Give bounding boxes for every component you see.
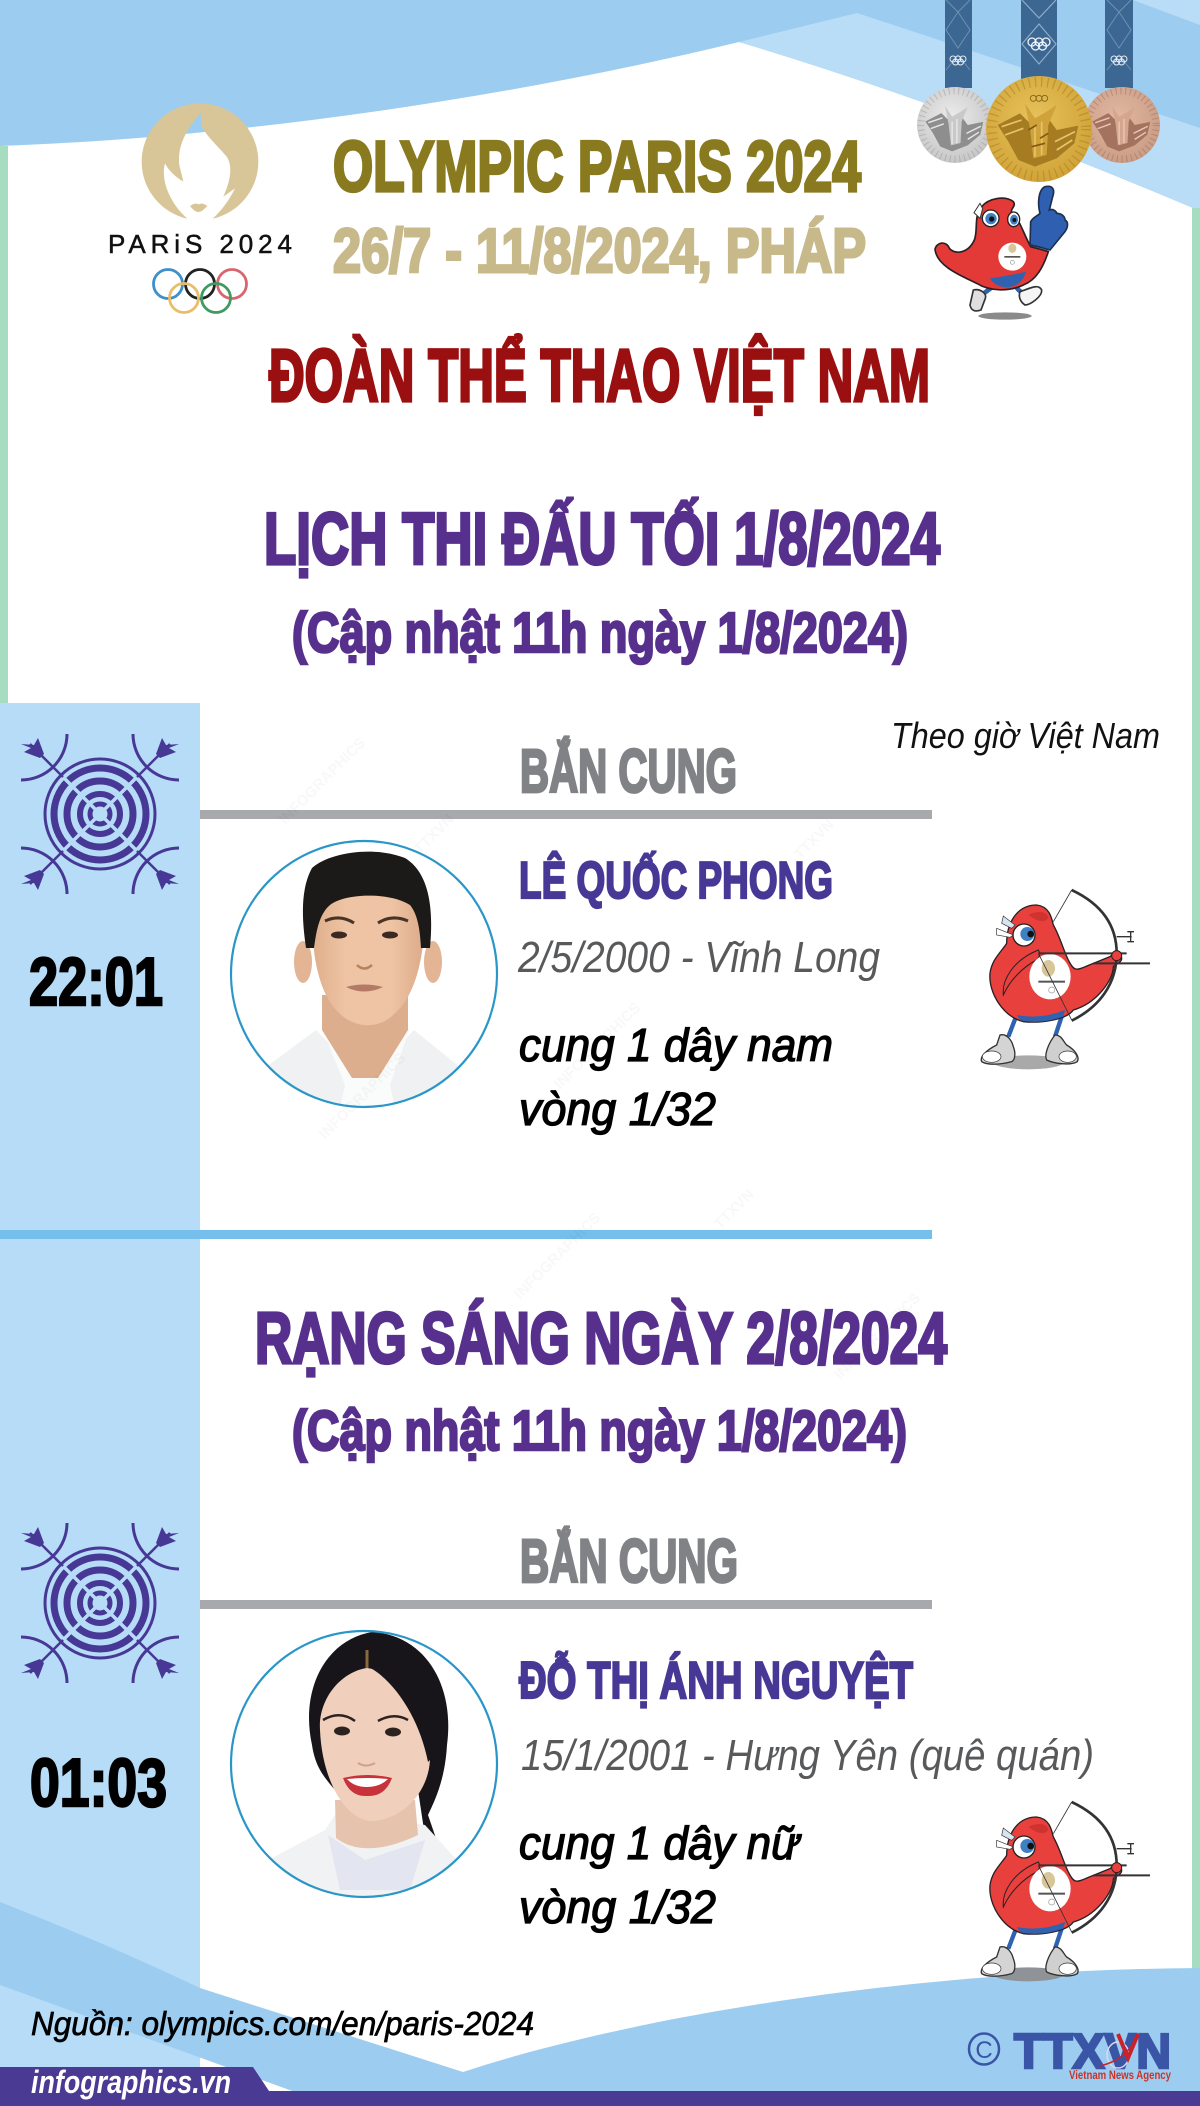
glove [1030, 186, 1067, 250]
footer site name: infographics.vn [31, 2064, 231, 2100]
ears [294, 941, 312, 983]
copyright mark: C [975, 2037, 993, 2064]
watermarks: TTXVN [711, 1186, 758, 1233]
collar [328, 1835, 425, 1890]
chest badge [998, 243, 1026, 271]
globe swoosh [1100, 2034, 1138, 2068]
round line 2: vòng 1/32 [519, 1881, 716, 1933]
neck [322, 995, 408, 1078]
shirt [269, 1030, 458, 1104]
legs [982, 278, 1024, 295]
time: 01:03: 01:03 [30, 1745, 167, 1821]
gold ribbon [1021, 0, 1057, 82]
flame emblem [142, 103, 258, 219]
heading: archery 2: BẮN CUNG [520, 1527, 738, 1595]
subheading: update time 2: (Cập nhật 11h ngày 1/8/2024) [292, 1399, 907, 1463]
wordmark: PARiS 2024 [108, 229, 292, 259]
fringe [372, 1668, 430, 1762]
heading: dates: 26/7 - 11/8/2024, PHÁP [333, 217, 866, 286]
heading: evening schedule: LỊCH THI ĐẤU TỐI 1/8/2024 [264, 498, 940, 580]
copyright mark [969, 2034, 999, 2064]
heading: early morning schedule: RẠNG SÁNG NGÀY 2/8/2024 [255, 1299, 947, 1379]
footer bar [0, 2067, 1200, 2106]
face [312, 892, 425, 1025]
bottom blue wave [0, 1902, 1200, 2092]
left green edge [0, 146, 8, 703]
shadow [978, 312, 1032, 320]
athlete portrait: Lê Quốc Phong [231, 841, 497, 1120]
mascot: archer 2 [981, 1802, 1150, 1981]
source note: Nguồn: olympics.com/en/paris-2024 [31, 2005, 534, 2042]
event line 1: cung 1 dây nam [519, 1019, 833, 1071]
divider: archery 1 [200, 810, 932, 819]
watermarks: TTXVN [791, 816, 838, 863]
watermarks: INFOGRAPHICS [276, 734, 369, 828]
mascot: running Phryge with foam hand [935, 186, 1067, 320]
watermarks: TTXVN [411, 811, 458, 858]
medals [917, 0, 1160, 182]
hair [303, 852, 431, 948]
jacket [272, 1815, 455, 1896]
watermarks: INFOGRAPHICS [316, 1049, 409, 1143]
cockade [974, 203, 983, 218]
heading: Olympic Paris 2024: OLYMPIC PARIS 2024 [333, 128, 861, 207]
icon: archery target 2 [21, 1523, 179, 1683]
neck [335, 1800, 418, 1848]
divider: blue section [0, 1230, 932, 1239]
subheading: update time 1: (Cập nhật 11h ngày 1/8/2024) [292, 601, 908, 665]
face [320, 1668, 430, 1821]
shoes [970, 287, 1042, 311]
mascot: archer 1 [981, 890, 1150, 1069]
bronze ribbon [1105, 0, 1133, 88]
athlete birth info 1: 2/5/2000 - Vĩnh Long [517, 933, 880, 982]
silver medal [917, 87, 993, 163]
round line 1: vòng 1/32 [519, 1083, 716, 1135]
wordmark: TTXVN [1014, 2025, 1171, 2079]
left time column [0, 703, 200, 2106]
facial features [323, 1715, 408, 1721]
divider: archery 2 [200, 1600, 932, 1609]
icon: archery target 1 [21, 734, 179, 894]
logo: TTXVN [969, 2025, 1172, 2082]
heading: archery 1: BẮN CUNG [520, 737, 737, 805]
body [935, 198, 1048, 290]
top blue banner [0, 0, 1200, 211]
athlete name: Đỗ Thị Ánh Nguyệt: ĐỖ THỊ ÁNH NGUYỆT [519, 1651, 913, 1710]
eyes [982, 210, 1020, 227]
right green edge [1192, 208, 1200, 1973]
facial features [325, 918, 408, 923]
gold medal [986, 76, 1092, 182]
watermarks: INFOGRAPHICS [831, 1289, 924, 1383]
agency caption: Vietnam News Agency [1069, 2070, 1172, 2082]
bronze medal [1084, 87, 1160, 163]
watermarks: INFOGRAPHICS [551, 999, 644, 1093]
watermarks [276, 734, 924, 1383]
note: Vietnam time: Theo giờ Việt Nam [891, 715, 1160, 756]
time: 22:01: 22:01 [29, 944, 163, 1020]
olympic rings [154, 270, 246, 312]
silver ribbon [945, 0, 972, 88]
logo: Paris 2024 [108, 103, 292, 312]
hair back [309, 1632, 448, 1850]
watermarks: INFOGRAPHICS [511, 1209, 604, 1303]
athlete birth info 2: 15/1/2001 - Hưng Yên (quê quán) [521, 1731, 1094, 1780]
athlete portrait: Đỗ Thị Ánh Nguyệt [231, 1631, 497, 1900]
athlete name: Lê Quốc Phong: LÊ QUỐC PHONG [519, 851, 833, 910]
event line 2: cung 1 dây nữ [519, 1817, 802, 1869]
